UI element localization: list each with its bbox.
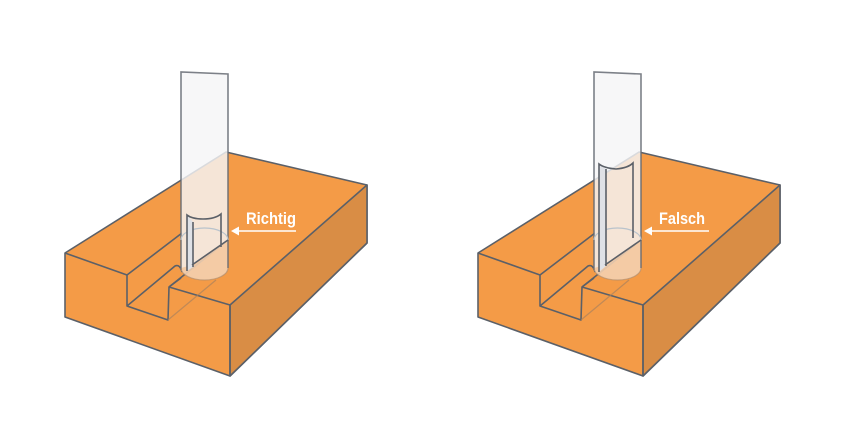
- label: Falsch: Falsch: [659, 209, 705, 228]
- workpiece block: [65, 152, 367, 376]
- workpiece block: [478, 152, 780, 376]
- arrow: Falsch: [644, 226, 709, 236]
- cutting edge: [187, 215, 193, 271]
- router bit: [581, 72, 641, 320]
- router bit: [168, 72, 228, 320]
- label: Richtig: Richtig: [246, 209, 296, 228]
- panel: wrong setup: [478, 72, 780, 376]
- cutting edge: [599, 164, 606, 272]
- arrow: Richtig: [231, 226, 296, 236]
- panel: correct setup: [65, 72, 367, 376]
